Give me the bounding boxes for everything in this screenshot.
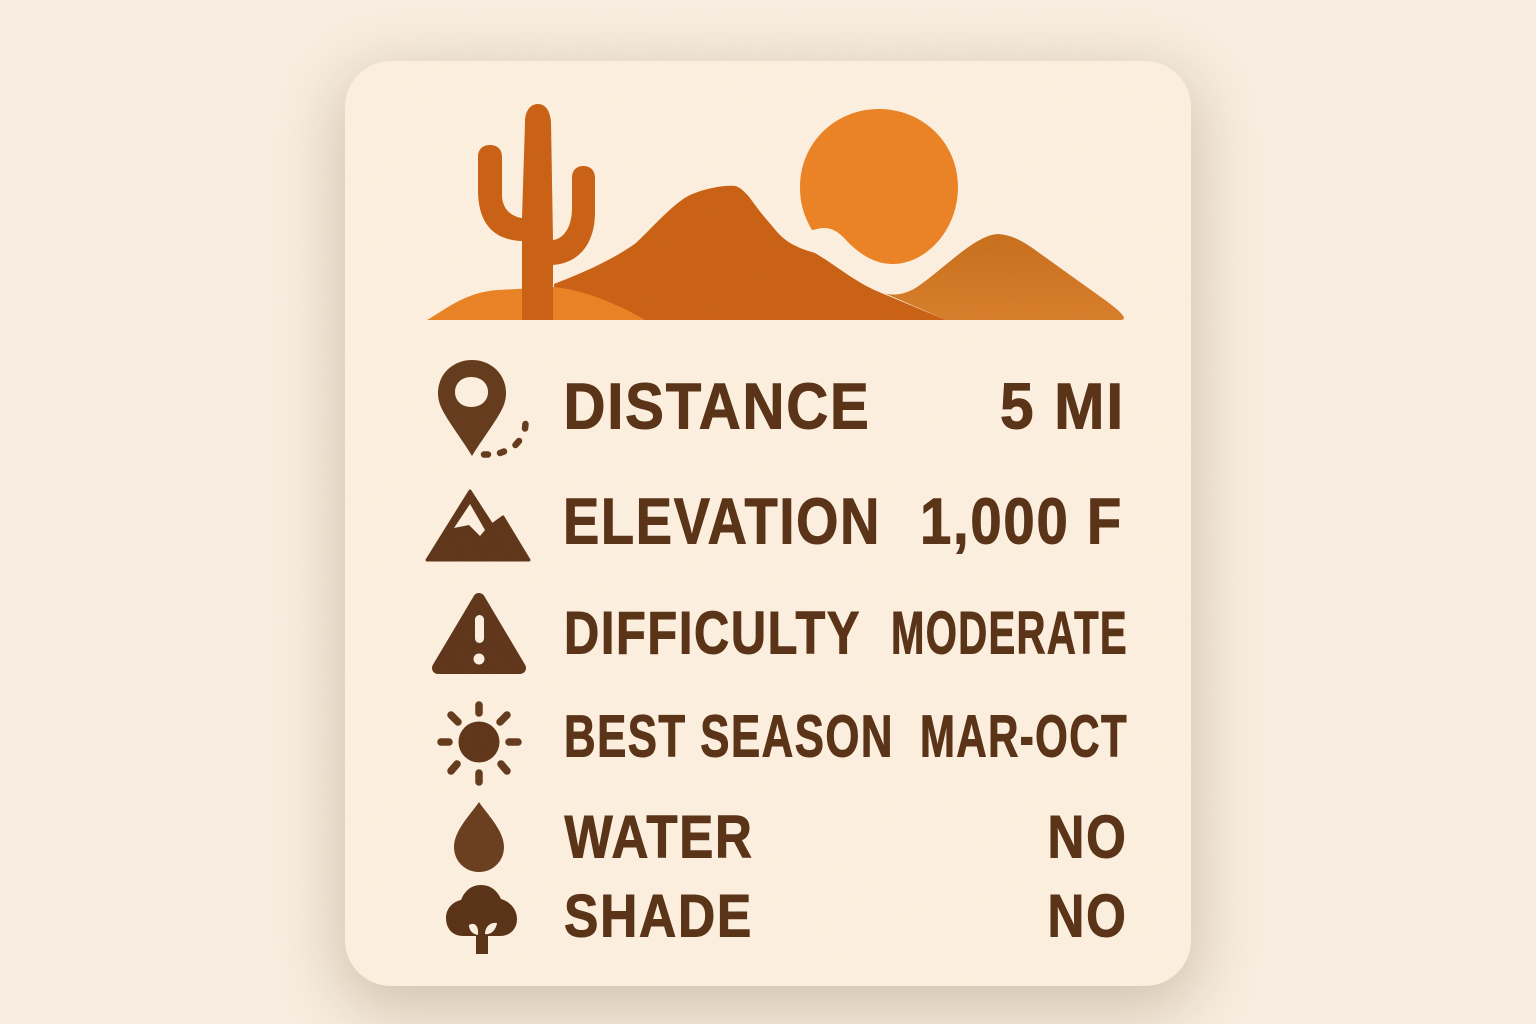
label: water: WATER <box>564 804 754 870</box>
label: distance: DISTANCE <box>564 370 870 442</box>
icon: sun rays <box>441 705 518 782</box>
value: water: NO <box>1048 804 1128 870</box>
icon: saguaro cactus <box>478 104 595 320</box>
icon: warning triangle <box>438 599 520 668</box>
label: shade: SHADE <box>564 882 753 950</box>
value: best season: MAR-OCT <box>920 704 1128 770</box>
label: best season: BEST SEASON <box>564 704 894 770</box>
value: distance: 5 MI <box>1000 370 1125 442</box>
icon: sun <box>800 109 958 264</box>
label: difficulty: DIFFICULTY <box>564 600 861 666</box>
label: elevation: ELEVATION <box>563 484 881 558</box>
value: difficulty: MODERATE <box>891 600 1128 666</box>
value: elevation: 1,000 F <box>920 484 1123 558</box>
panel: trail info card <box>345 61 1191 986</box>
icon: mountain <box>427 491 529 560</box>
value: shade: NO <box>1048 882 1128 950</box>
foreground dune <box>427 287 645 320</box>
central mountain <box>554 186 946 320</box>
icon: water drop <box>454 802 504 872</box>
right mountain <box>884 234 1124 320</box>
illustration: desert landscape <box>427 104 1124 320</box>
icon: tree <box>446 885 517 954</box>
icon: map pin with dotted trail <box>438 360 526 456</box>
